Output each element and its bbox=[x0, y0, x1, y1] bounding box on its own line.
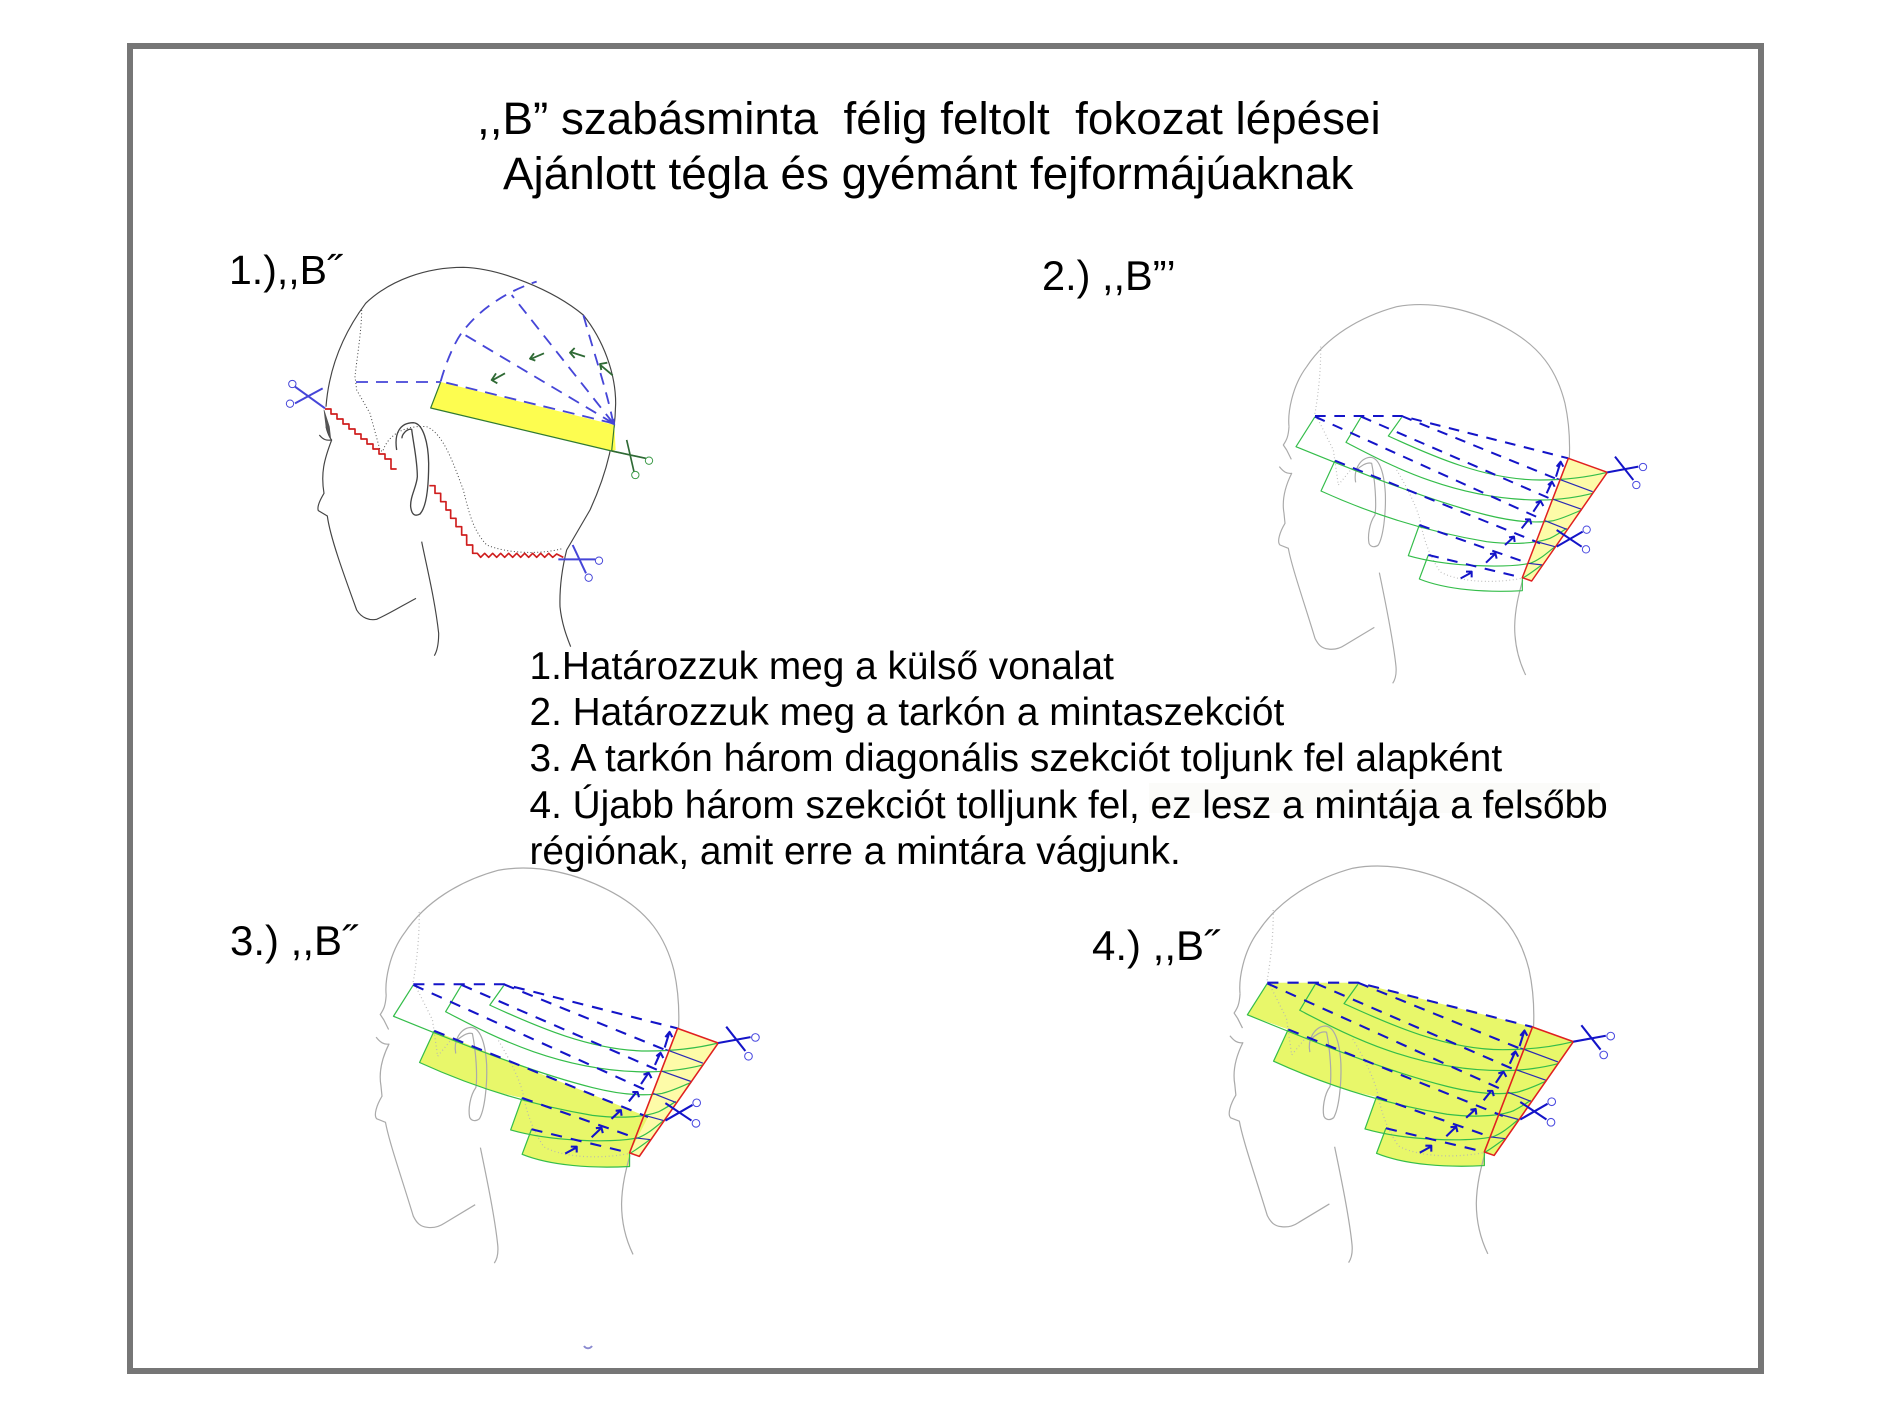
sections, guides, arrows, scissors bbox=[1247, 983, 1615, 1166]
head diagram 3 bbox=[375, 868, 759, 1263]
red zigzag front bbox=[325, 409, 397, 469]
label: step 3: 3.) ,,B˝ bbox=[230, 917, 356, 964]
yellow section bbox=[431, 382, 616, 451]
faint highlight behind text bbox=[1149, 783, 1600, 813]
head lines bbox=[1279, 305, 1570, 683]
title line 1: ,,B” szabásminta félig feltolt fokozat lépései bbox=[477, 93, 1381, 144]
eye mark bbox=[324, 410, 331, 438]
small speck at bottom bbox=[584, 1346, 592, 1348]
head outline bbox=[318, 267, 616, 656]
title line 2: Ajánlott tégla és gyémánt fejformájúaknak bbox=[503, 148, 1353, 199]
head diagram 4 bbox=[1229, 866, 1615, 1263]
scissors: front bbox=[286, 380, 325, 408]
blue dashed guides bbox=[356, 282, 613, 423]
green section edge bbox=[431, 382, 646, 458]
red triangle pale fill bbox=[630, 1028, 718, 1156]
dotted hairline bbox=[355, 310, 563, 552]
label: step 4: 4.) ,,B˝ bbox=[1092, 922, 1218, 969]
sections, guides, arrows, scissors bbox=[1296, 416, 1647, 591]
label: step 1: 1.),,B˝ bbox=[229, 247, 341, 293]
red triangle pale fill bbox=[1522, 458, 1607, 581]
sections, guides, arrows, scissors bbox=[393, 984, 759, 1167]
blue arrowhead bbox=[608, 419, 615, 425]
head diagram 2 bbox=[1279, 305, 1647, 683]
green arrows bbox=[492, 348, 613, 383]
scissors: nape bbox=[558, 545, 603, 581]
head lines bbox=[1229, 866, 1534, 1263]
head diagram 1 bbox=[286, 267, 653, 656]
scissors: back bbox=[612, 440, 653, 479]
instructions text block: 1.Határozzuk meg a külső vonalat 2. Határozzuk meg a tarkón a mintaszekciót 3. A tarkón három diagonális szekciót toljunk fel alapként 4. Újabb három szekciót tolljunk fel, ez lesz a mintája a felsőbb régiónak, amit erre a mintára vágjunk. bbox=[530, 644, 1608, 873]
head lines bbox=[375, 868, 679, 1263]
red zigzag nape bbox=[429, 486, 563, 557]
yellow lower sections bbox=[420, 1031, 648, 1167]
yellow all sections bbox=[1247, 983, 1573, 1166]
label: step 2: 2.) ,,B”’ bbox=[1042, 252, 1176, 299]
